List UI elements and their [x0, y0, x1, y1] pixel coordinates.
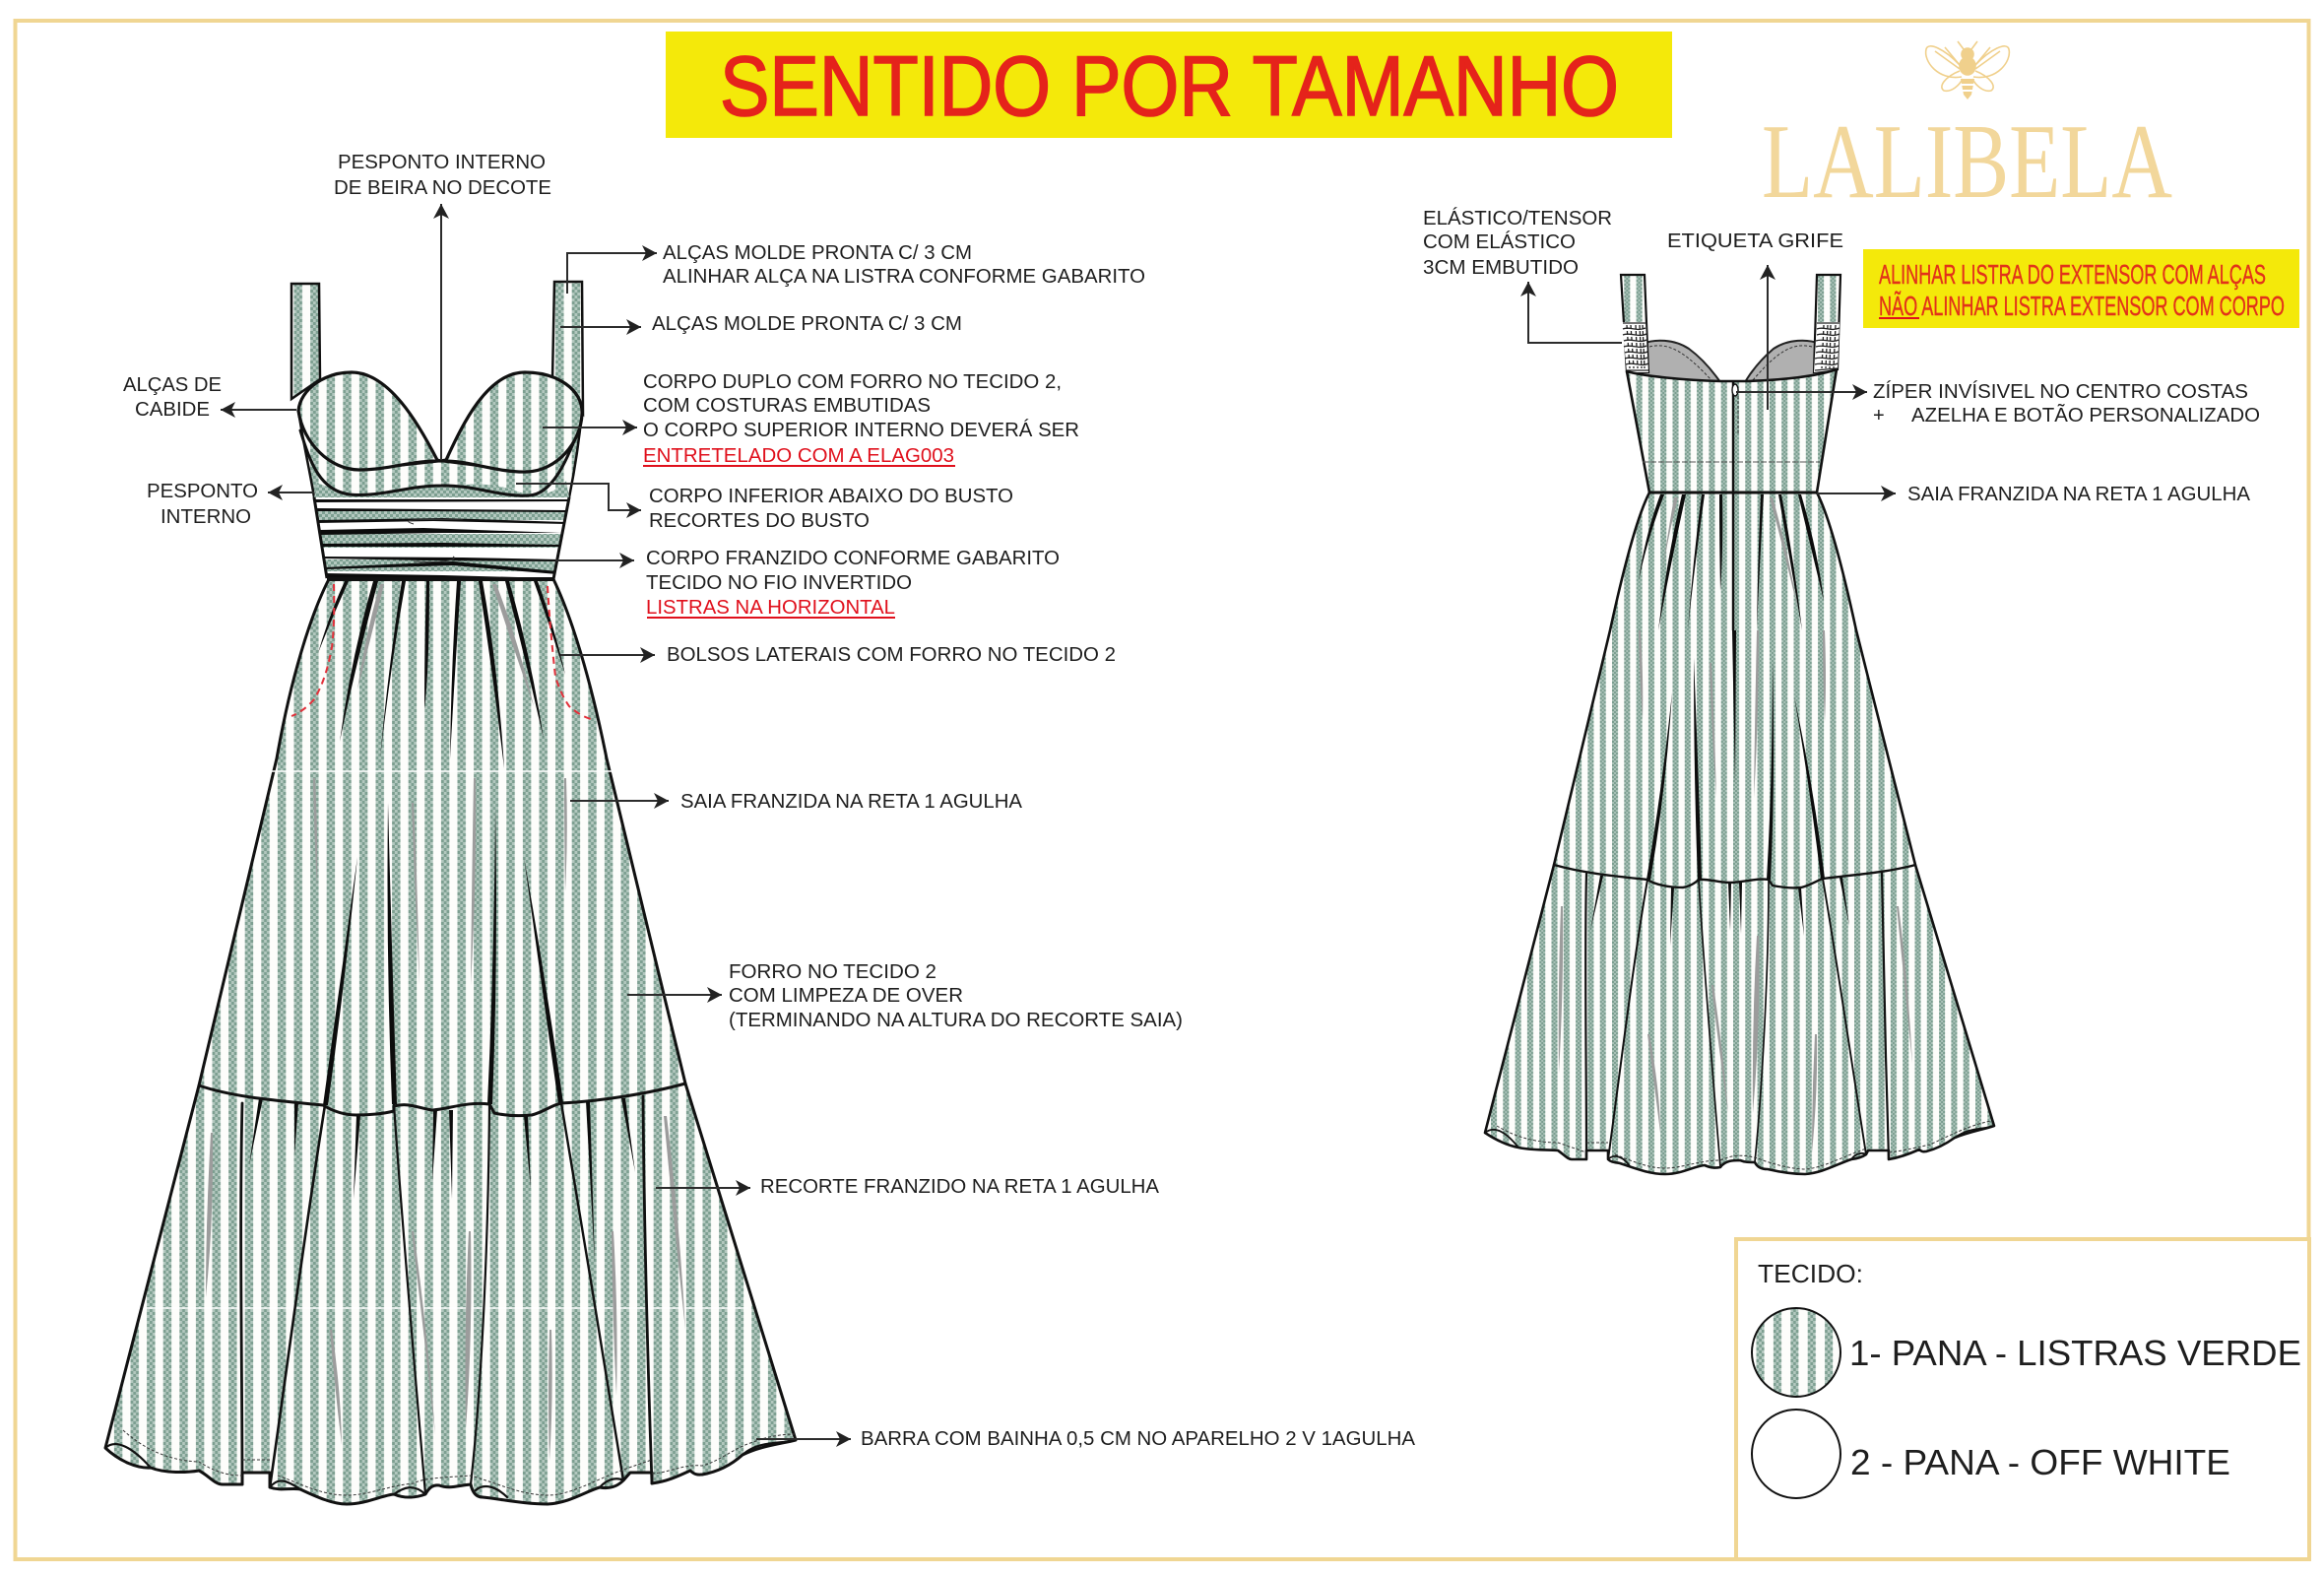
label: elástico: ELÁSTICO/TENSOR: [1423, 207, 1612, 230]
under-hem rolls: [105, 1444, 151, 1468]
label: pesponto interno de beira no decote: [334, 152, 551, 199]
elastic gathers: [1622, 322, 1840, 372]
front skirt: [105, 579, 796, 1504]
fabric swatch 1: [1752, 1308, 1840, 1397]
panel: tecido legend: [1736, 1239, 2309, 1559]
title banner: SENTIDO POR TAMANHO: [720, 39, 1619, 134]
faint grid seams: [144, 771, 748, 1308]
fabric label 2: 2 - PANA - OFF WHITE: [1850, 1442, 2230, 1482]
label: corpo inferior: [649, 486, 1013, 532]
label: elástico: 3CM EMBUTIDO: [1423, 257, 1579, 279]
logo: Lalibela: [1762, 41, 2172, 221]
label: alças molde: ALÇAS MOLDE PRONTA C/ 3 CM: [652, 313, 962, 335]
callout arrows: back: [1528, 265, 1896, 493]
icon: bee: [1926, 41, 2009, 99]
label: corpo duplo: ENTRETELADO COM A ELAG003: [643, 445, 954, 467]
label: corpo duplo: O CORPO SUPERIOR INTERNO DEVERÁ SER: [643, 419, 1079, 441]
back grey inner cups: [1643, 341, 1820, 382]
label: forro: [729, 961, 1183, 1031]
label: corpo duplo: [643, 371, 1079, 467]
label: saia franzida back: SAIA FRANZIDA NA RETA 1 AGULHA: [1907, 484, 2251, 505]
label: zíper: +: [1873, 405, 1885, 427]
label: zíper: ZÍPER INVÍSIVEL NO CENTRO COSTAS: [1873, 380, 2248, 403]
label: alças alinhar: ALINHAR ALÇA NA LISTRA CONFORME GABARITO: [663, 266, 1145, 288]
hem stitching: [123, 1430, 796, 1495]
back dress technical drawing: [1485, 275, 1994, 1174]
label: alças de cabide: CABIDE: [135, 399, 210, 421]
front bodice: [298, 411, 582, 497]
legend heading: TECIDO:: [1758, 1259, 1863, 1288]
label: corpo franzido: TECIDO NO FIO INVERTIDO: [646, 572, 912, 594]
label: corpo inferior: RECORTES DO BUSTO: [649, 510, 870, 532]
label: pesponto interno: INTERNO: [161, 506, 251, 528]
grey fold shading: [206, 584, 685, 1461]
logo: Lalibela: LALIBELA: [1762, 103, 2172, 221]
callout arrows: front: [221, 204, 851, 1439]
back skirt: [1485, 492, 1994, 1174]
label: forro: COM LIMPEZA DE OVER: [729, 985, 963, 1007]
black skirt folds: [241, 581, 652, 1494]
label: zíper: AZELHA E BOTÃO PERSONALIZADO: [1911, 403, 2260, 427]
pockets: red dashed lines: [291, 584, 591, 719]
label: elástico: [1423, 207, 1612, 279]
label: corpo duplo: COM COSTURAS EMBUTIDAS: [643, 395, 931, 417]
label: pesponto interno: PESPONTO: [147, 481, 258, 502]
front dress technical drawing: [105, 282, 796, 1504]
label: corpo inferior: CORPO INFERIOR ABAIXO DO BUSTO: [649, 486, 1013, 507]
label: corpo duplo: CORPO DUPLO COM FORRO NO TECIDO 2,: [643, 371, 1062, 393]
label: corpo franzido: LISTRAS NA HORIZONTAL: [646, 597, 895, 619]
label: pesponto interno de beira no decote: PESPONTO INTERNO: [338, 152, 546, 173]
zipper and centre back seam: [1732, 382, 1734, 630]
back tier seam: [1554, 865, 1915, 887]
label: etiqueta grife: ETIQUETA GRIFE: [1667, 230, 1843, 252]
label: forro: (TERMINANDO NA ALTURA DO RECORTE SAIA): [729, 1010, 1183, 1031]
back grey fold shading: [1559, 497, 1912, 1152]
label: bolsos: BOLSOS LATERAIS COM FORRO NO TECIDO 2: [667, 644, 1116, 666]
label: saia franzida front: SAIA FRANZIDA NA RETA 1 AGULHA: [680, 791, 1023, 813]
label: forro: FORRO NO TECIDO 2: [729, 961, 936, 983]
front straps: [291, 282, 583, 414]
front bust cups: [298, 372, 582, 472]
back hem stitching: [1497, 1121, 1991, 1169]
tier seam: [199, 1084, 685, 1116]
back straps with elastic: [1621, 275, 1840, 372]
fabric swatch 2: [1752, 1410, 1840, 1498]
front gathered waistband: [305, 497, 581, 579]
label: corpo franzido: CORPO FRANZIDO CONFORME GABARITO: [646, 548, 1060, 569]
fabric label 1: 1- PANA - LISTRAS VERDE: [1849, 1333, 2301, 1373]
label: zíper: [1873, 380, 2260, 427]
label: barra: BARRA COM BAINHA 0,5 CM NO APARELHO 2 V 1AGULHA: [861, 1428, 1416, 1450]
label: pesponto interno: [147, 481, 258, 528]
label: pesponto interno de beira no decote: DE BEIRA NO DECOTE: [334, 177, 551, 199]
label: recorte franzido: RECORTE FRANZIDO NA RETA 1 AGULHA: [760, 1176, 1160, 1198]
label: corpo franzido: [646, 548, 1060, 619]
callout: alinhar listra: [1863, 249, 2299, 328]
label: alças alinhar: ALÇAS MOLDE PRONTA C/ 3 CM: [663, 242, 972, 264]
label: alças de cabide: [123, 374, 222, 421]
label: alças alinhar: [663, 242, 1145, 288]
back skirt folds: [1585, 494, 1889, 1167]
label: alças de cabide: ALÇAS DE: [123, 374, 222, 396]
label: elástico: COM ELÁSTICO: [1423, 230, 1576, 253]
back bodice: [1627, 369, 1837, 630]
